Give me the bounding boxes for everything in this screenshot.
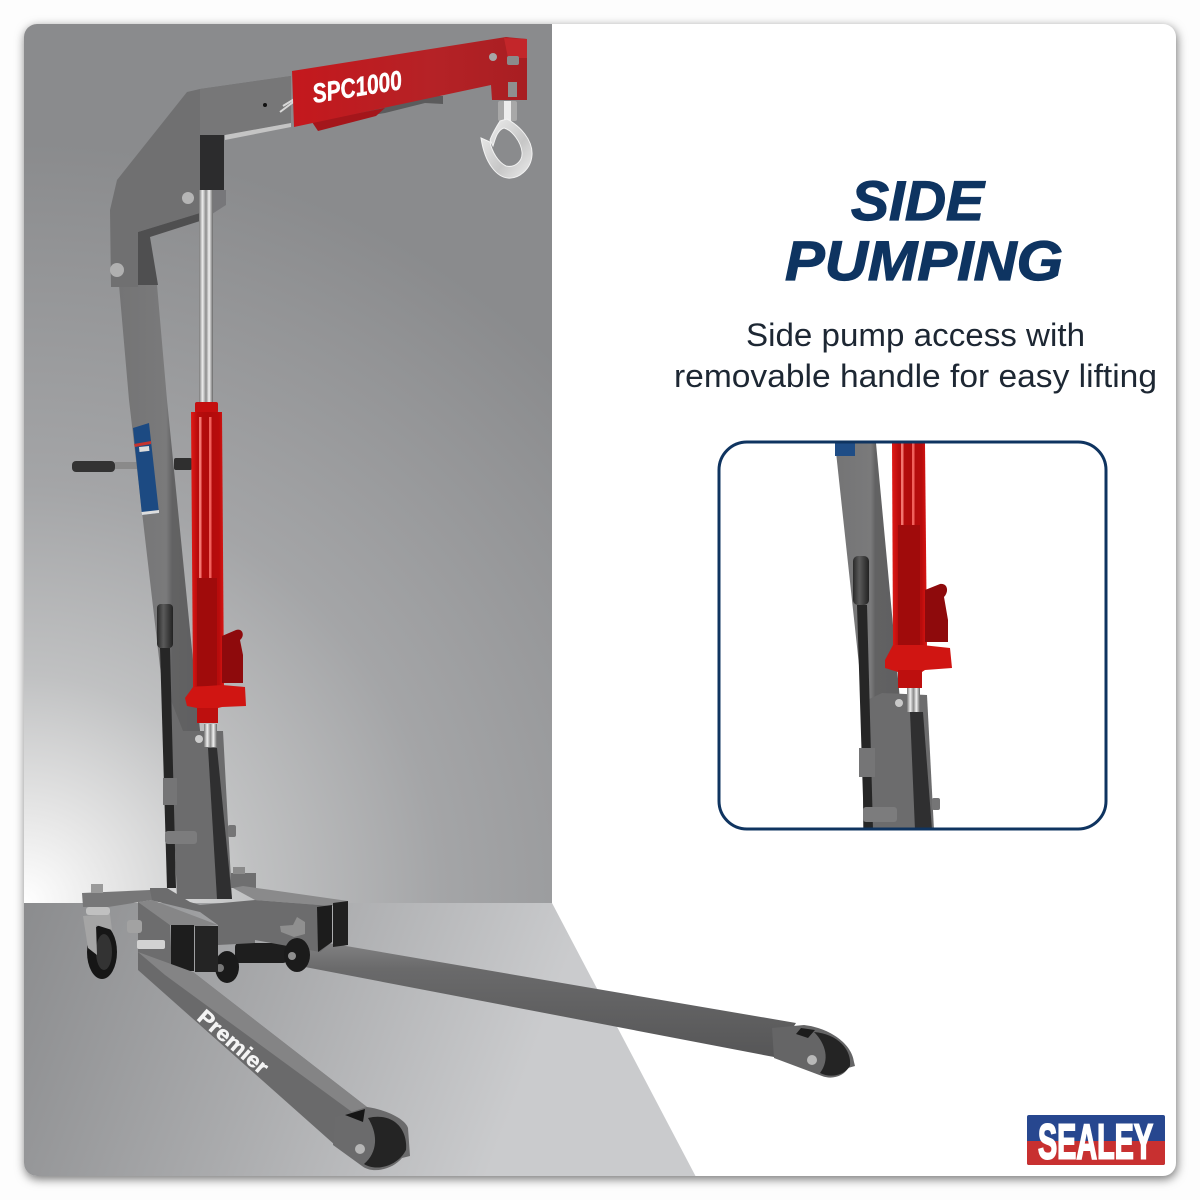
rear long leg — [305, 939, 855, 1078]
red boom — [292, 37, 527, 131]
panel: side pump close-up — [719, 442, 1106, 830]
pump handle — [157, 604, 177, 888]
title — [785, 169, 1063, 292]
front long leg — [138, 952, 410, 1170]
text block: description — [674, 317, 1157, 394]
illustration: engine crane — [72, 37, 855, 1170]
upper arm — [110, 76, 296, 287]
red hydraulic ram — [185, 402, 246, 747]
front leg socket — [127, 900, 239, 983]
inset pump handle — [853, 556, 940, 830]
text: Premier: Premier — [193, 1005, 273, 1079]
panel: studio backdrop — [24, 24, 696, 1176]
hand wheel handle — [72, 458, 192, 472]
cross pins — [165, 825, 236, 844]
lifting hook — [481, 101, 532, 178]
title: SIDE — [851, 169, 986, 232]
piston rod — [199, 190, 213, 404]
text block: description: removable handle for easy lifting — [674, 358, 1157, 394]
base frame — [82, 867, 348, 972]
inset red ram — [885, 443, 952, 712]
inset post — [835, 443, 934, 830]
safety label — [133, 423, 159, 515]
caster wheel — [83, 907, 117, 979]
upright post — [119, 285, 232, 899]
text: SPC1000: SPC1000 — [310, 65, 404, 109]
title: PUMPING — [785, 229, 1063, 292]
text block: description: Side pump access with — [746, 317, 1085, 353]
